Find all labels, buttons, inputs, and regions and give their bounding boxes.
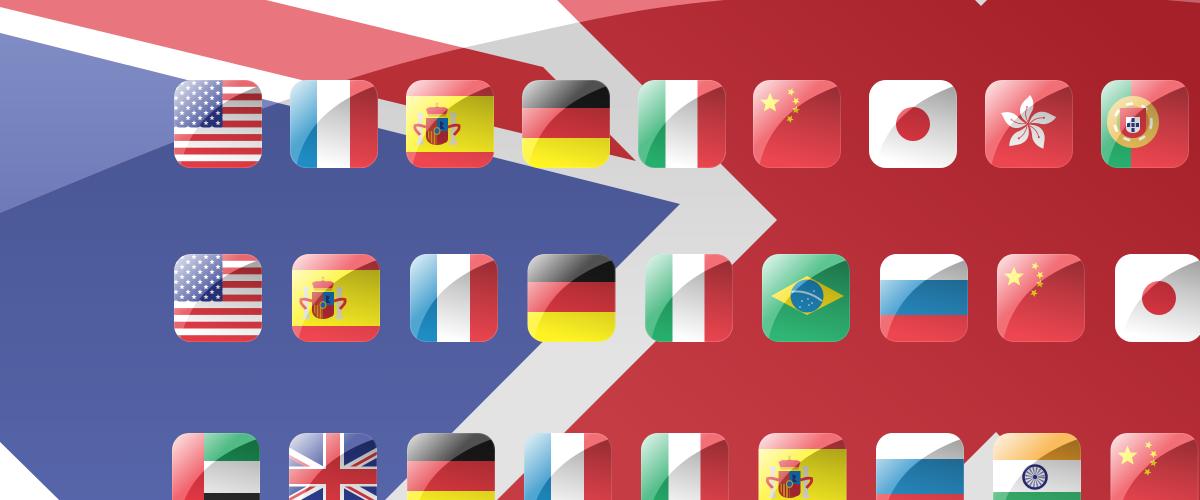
background: blue chevron: [0, 33, 680, 500]
icon: Spain flag: [406, 80, 494, 168]
background: grey chevron band: [0, 0, 777, 500]
icon: Spain flag: [292, 254, 380, 342]
icon: India flag: [993, 433, 1081, 500]
icon row 2: [174, 254, 1200, 342]
icon: USA flag: [174, 254, 262, 342]
icon: Portugal flag: [1101, 80, 1189, 168]
icon: USA flag: [174, 80, 262, 168]
icon: Spain flag: [758, 433, 846, 500]
icon: Italy flag: [641, 433, 729, 500]
icon: UAE flag: [172, 433, 260, 500]
icon: France flag: [290, 80, 378, 168]
background: small grey tip at top: [975, 0, 987, 6]
icon: Japan flag: [869, 80, 957, 168]
background: gloss at top right corner: [1166, 0, 1200, 3]
icon: Italy flag: [638, 80, 726, 168]
background: white corner: [0, 442, 59, 500]
icon row 3: [172, 433, 1198, 500]
icon: Germany flag: [522, 80, 610, 168]
background: large gloss highlight over the flag colours: [0, 0, 724, 213]
icon: China flag: [997, 254, 1085, 342]
icon: Russia flag: [876, 433, 964, 500]
icon: France flag: [524, 433, 612, 500]
icon: Russia flag: [880, 254, 968, 342]
icon: UK flag: [279, 433, 387, 500]
icon: France flag: [410, 254, 498, 342]
icon row 1: [174, 80, 1189, 168]
icon: Germany flag: [528, 254, 616, 342]
icon: Brazil flag: [762, 254, 850, 342]
icon: Italy flag: [645, 254, 733, 342]
icon: China flag: [1110, 433, 1198, 500]
background: small grey shape behind India icon: [964, 432, 1010, 500]
icon: Japan flag: [1115, 254, 1200, 342]
background: upper red stripe: [0, 0, 636, 161]
icon: China flag: [753, 80, 841, 168]
icon: Germany flag: [407, 433, 495, 500]
icon: Hong Kong flag: [985, 80, 1073, 168]
